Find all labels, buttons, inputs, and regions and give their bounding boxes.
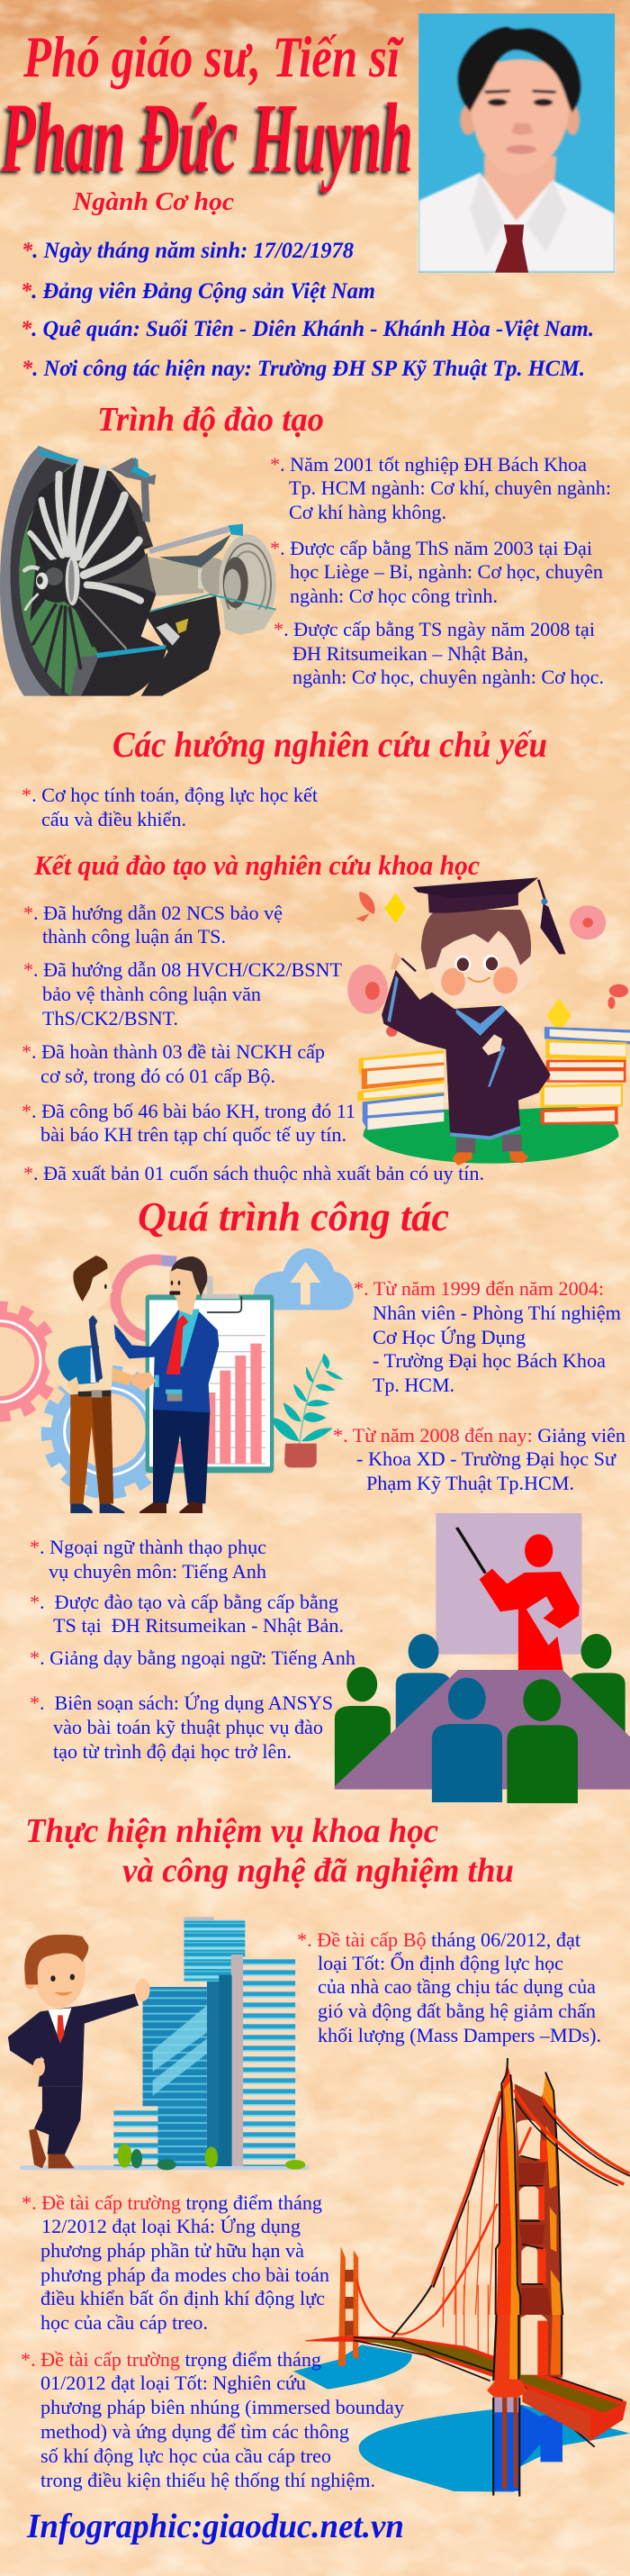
university project 2 text: 01/2012 đạt loại Tốt: Nghiên cứu [40,2372,306,2394]
right book stack [540,1027,630,1124]
career timeline: - Trường Đại học Bách Khoa [373,1349,606,1372]
far tower [338,2246,358,2366]
ground [19,2165,310,2170]
personal details: *. Đảng viên Đảng Cộng sản Việt Nam [21,279,375,304]
legs and shoes [456,1138,475,1153]
head [428,933,533,1003]
tie [495,224,528,273]
right cables [515,2090,624,2184]
diploma [391,952,401,970]
man left [45,1256,132,1513]
career timeline: Phạm Kỹ Thuật Tp.HCM. [366,1472,574,1494]
training list: ngành: Cơ học công trình. [290,585,498,607]
blue trim strips [39,445,78,464]
business people and chart [0,1255,274,1513]
right leg [515,2073,562,2315]
thin lower blades [33,597,126,692]
career timeline: *. Từ năm 2008 đến nay: Giảng viên [333,1424,626,1447]
university project 2 text: *. Đề tài cấp trường trọng điểm tháng [21,2348,321,2371]
research directions text: cấu và điều khiển. [41,808,186,830]
eyes and brows [484,89,556,94]
icon: jet engine [0,445,276,696]
hand [482,1034,502,1056]
neck [484,156,556,223]
water [293,2345,412,2390]
bridge lower section [293,2246,630,2497]
trees [117,2144,131,2168]
hangers [443,2285,488,2354]
training list: Cơ khí hàng không. [289,501,446,523]
university project 2 text [21,2348,404,2491]
far cables [356,2279,435,2335]
results list: *. Đã công bố 46 bài báo KH, trong đó 11 [22,1100,356,1122]
heading: science and technology tasks: Thực hiện nhiệm vụ khoa học [25,1812,438,1850]
gown [382,970,551,1138]
hair [458,27,580,113]
career timeline: - Khoa XD - Trường Đại học Sư [356,1447,616,1470]
subtitle: field: Ngành Cơ học [72,188,235,216]
grass [364,1106,619,1164]
university project 1 text: 12/2012 đạt loại Khá: Ứng dụng [41,2215,301,2237]
university project 1 text: *. Đề tài cấp trường trọng điểm tháng [22,2191,322,2214]
university project 2 text: trong điều kiện thiếu hệ thống thí nghiệm. [40,2469,375,2491]
national project text: loại Tốt: Ổn định động lực học [318,1952,563,1974]
personal details: *. Ngày tháng năm sinh: 17/02/1978 [22,239,354,263]
results list: bảo vệ thành công luận văn [42,983,261,1005]
man head [24,1971,36,1989]
head right [169,1270,201,1315]
results list: cơ sở, trong đó có 01 cấp Bộ. [40,1065,275,1087]
bridge upper tower [432,2058,630,2315]
university project 1 text: học của cầu cáp treo. [40,2311,208,2334]
illustration: handshake with chart [0,1248,354,1513]
languages and teaching list: *. Biên soạn sách: Ứng dụng ANSYS [30,1692,333,1714]
languages and teaching list [30,1536,356,1763]
languages and teaching list: vào bài toán kỹ thuật phục vụ đào [53,1716,323,1738]
results list: *. Đã hướng dẫn 08 HVCH/CK2/BSNT [23,958,343,981]
clipboard [146,1294,274,1473]
outer ring [0,446,78,696]
national project text: khối lượng (Mass Dampers –MDs). [318,2024,601,2046]
collar [456,1006,506,1036]
training list: *. Được cấp bằng TS ngày năm 2008 tại [274,618,595,640]
white blades [24,463,140,610]
heading: science and technology tasks: và công nghệ đã nghiệm thu [122,1852,514,1890]
top bracket [111,458,156,522]
tassel [538,880,545,901]
training list: học Liège – Bỉ, ngành: Cơ học, chuyên [290,560,603,583]
ears [460,105,476,135]
man jacket [8,1993,139,2087]
hair [421,910,531,970]
research directions text [22,784,318,830]
illustration: suspension bridge [293,2058,630,2497]
man right [114,1256,219,1513]
languages and teaching list: *. Giảng dạy bằng ngoại ngữ: Tiếng Anh [30,1646,356,1669]
university project 1 text [22,2191,329,2334]
heading: training: Trình độ đào tạo [97,401,324,439]
hub [35,559,78,603]
pink gear [0,1307,55,1416]
languages and teaching list: TS tại ĐH Ritsumeikan - Nhật Bản. [53,1614,344,1637]
training list: ĐH Ritsumeikan – Nhật Bản, [292,642,528,665]
source credit: Infographic:giaoduc.net.vn [26,2508,404,2545]
university project 2 text: method) và ứng dụng để tìm các thông [40,2420,349,2443]
training list [270,453,611,688]
career timeline [333,1277,626,1494]
results list [22,902,484,1184]
donut chart [116,1260,162,1337]
national project text: gió và động đất bằng hệ giảm chấn [318,2000,596,2022]
title: academic rank: Phó giáo sư, Tiến sĩ [22,25,404,90]
university project 2 text: số khí động lực học của cầu cáp treo [40,2444,331,2467]
career timeline: Nhân viên - Phòng Thí nghiệm [373,1302,621,1324]
career timeline: Cơ Học Ứng Dụng [373,1326,526,1348]
accessories [141,596,220,696]
results list: bài báo KH trên tạp chí quốc tế uy tín. [40,1123,346,1146]
heading: science and technology tasks [25,1812,514,1890]
front leg [497,2063,518,2315]
languages and teaching list: vụ chuyên môn: Tiếng Anh [49,1560,266,1583]
strut [148,526,230,554]
illustration: graduate with books [347,877,630,1166]
left book stack [357,1050,444,1130]
training list: Tp. HCM ngành: Cơ khí, chuyên ngành: [289,476,611,499]
head left [85,1272,112,1316]
deck [305,2336,626,2441]
university project 1 text: phương pháp đa modes cho bài toán [40,2263,329,2286]
tower base [487,2380,527,2398]
career timeline: *. Từ năm 1999 đến năm 2004: [354,1277,604,1300]
heading: results: Kết quả đào tạo và nghiên cứu khoa học [33,849,480,881]
national project text: của nhà cao tầng chịu tác dụng của [318,1975,596,1998]
heading: research directions: Các hướng nghiên cứu chủ yếu [112,724,547,765]
cloud and plant [254,1248,354,1467]
national project text [297,1928,601,2046]
results list: *. Đã hoàn thành 03 đề tài NCKH cấp [22,1040,325,1063]
university project 1 text: điều khiển bất ổn định khí động lực [40,2287,325,2309]
man legs and shoes [34,2087,83,2155]
hangers [444,2117,499,2315]
windows [517,2120,541,2283]
bars [174,1344,262,1464]
heading: career: Quá trình công tác [138,1193,449,1239]
screen and presenter [436,1513,581,1678]
training list: *. Được cấp bằng ThS năm 2003 tại Đại [270,537,592,559]
blue gear [47,1371,169,1493]
university project 2 text: phương pháp biên nhúng (immersed bounday [40,2396,404,2418]
face [472,59,570,175]
personal details: *. Quê quán: Suối Tiên - Diên Khánh - Khánh Hòa -Việt Nam. [21,317,594,341]
illustration: businessman with buildings [8,1917,310,2170]
training list: *. Năm 2001 tốt nghiệp ĐH Bách Khoa [270,453,587,476]
green intake [20,466,102,696]
results list: ThS/CK2/BSNT. [42,1007,178,1029]
buildings [184,1920,245,1982]
nose and mouth [511,123,534,135]
portrait photo [418,14,615,273]
audience and table [335,1634,630,1803]
tower lower front leg [494,2312,518,2381]
languages and teaching list: *. Ngoại ngữ thành thạo phục [30,1536,266,1558]
flowers and sparkles [347,965,388,1014]
shirt [418,173,615,272]
results list: *. Đã xuất bản 01 cuốn sách thuộc nhà xuất bản có uy tín. [23,1162,484,1184]
languages and teaching list: *. Được đào tạo và cấp bằng cấp bằng [30,1591,338,1613]
left cables [433,2092,501,2288]
national project text: *. Đề tài cấp Bộ tháng 06/2012, đạt [297,1928,580,1951]
languages and teaching list: tạo từ trình độ đại học trở lên. [53,1740,292,1763]
research directions text: *. Cơ học tính toán, động lực học kết [22,784,318,806]
illustration: presenter and audience [335,1513,630,1803]
personal details: *. Nơi công tác hiện nay: Trường ĐH SP Kỹ Thuật Tp. HCM. [22,357,585,381]
results list: *. Đã hướng dẫn 02 NCS bảo vệ [23,902,283,924]
career timeline: Tp. HCM. [373,1374,454,1396]
training list: ngành: Cơ học, chuyên ngành: Cơ học. [292,666,604,688]
university project 1 text: phương pháp phần tử hữu hạn và [40,2239,304,2262]
tower lower right leg [518,2312,562,2378]
engine core rear rings [147,534,276,635]
results list: thành công luận án TS. [42,925,226,948]
mortarboard cap [428,889,518,913]
dark fan and cowl [27,464,166,696]
personal details [21,239,594,381]
right column orange [543,2073,561,2315]
